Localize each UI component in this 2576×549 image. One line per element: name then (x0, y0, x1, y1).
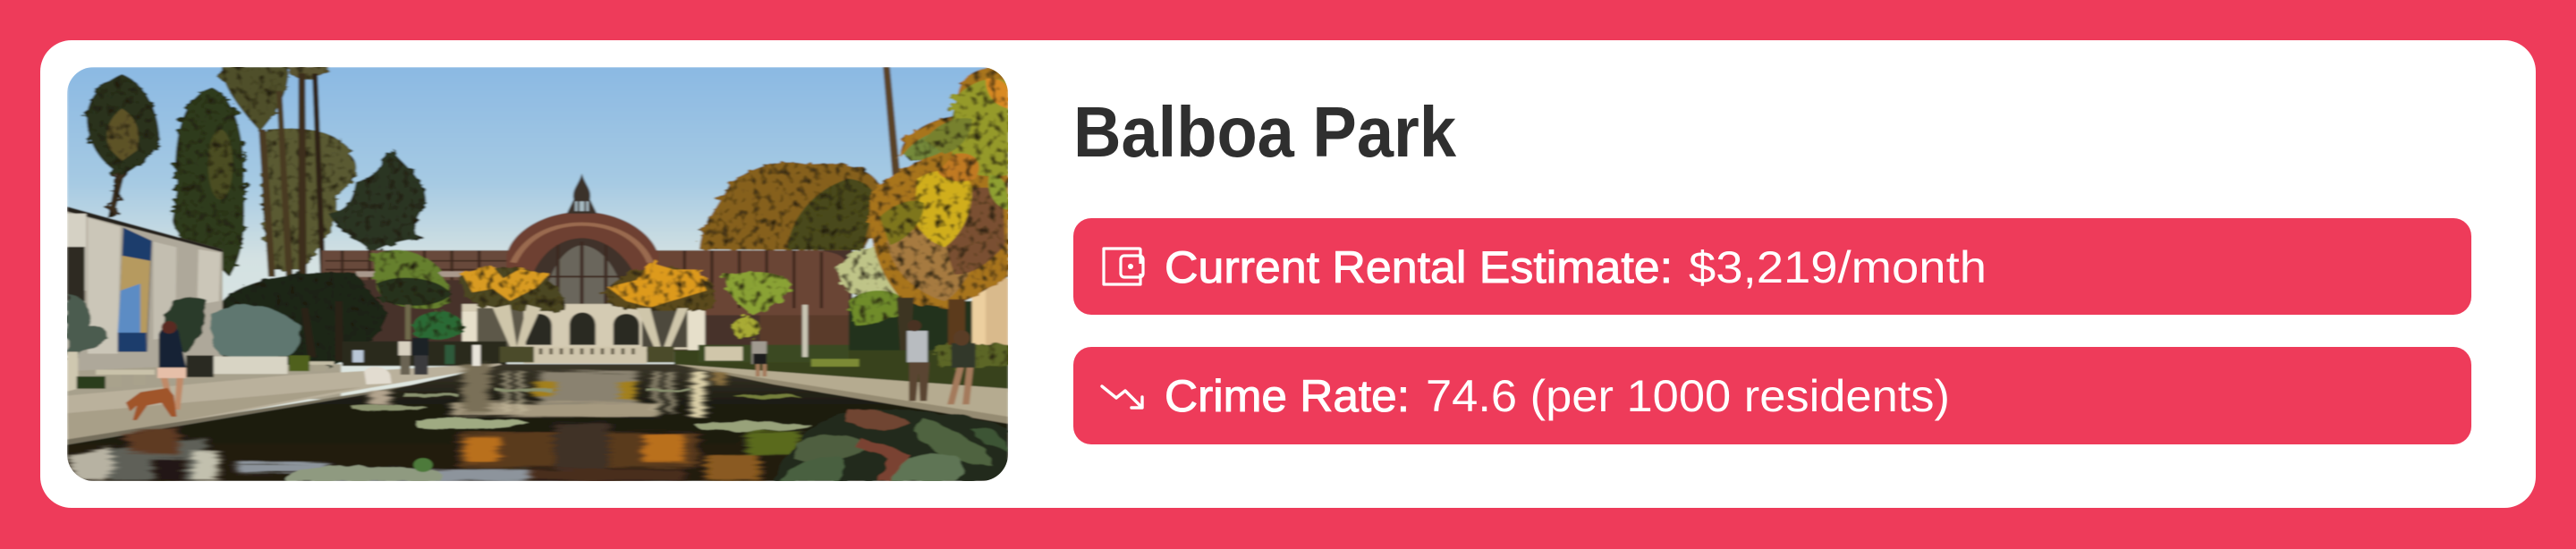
dome (506, 213, 658, 272)
heading: Balboa Park (1073, 92, 1456, 172)
icon: trending down arrow (1102, 386, 1142, 408)
near foliage (223, 68, 1008, 366)
lantern (567, 173, 597, 214)
planters and benches (212, 357, 287, 374)
crime value: 74.6 (per 1000 residents) (1426, 371, 1950, 421)
rental value: $3,219/month (1689, 242, 1987, 292)
palms right (838, 248, 902, 301)
arcade of the building (462, 304, 701, 350)
ground backing (67, 364, 341, 399)
stat bar: rental estimate (1073, 218, 2471, 315)
crime label: Crime Rate: (1165, 371, 1410, 421)
people (126, 320, 976, 420)
walkways (67, 363, 503, 444)
balustrade (523, 347, 647, 363)
photo: Balboa Park botanical building and lily pond (67, 67, 1008, 481)
palm trunks (258, 130, 275, 276)
right wall (972, 278, 1008, 347)
stat bar: crime rate (1073, 347, 2471, 444)
exhibit banner (118, 228, 152, 352)
lily pond (67, 364, 1008, 481)
icon: wallet (1104, 249, 1143, 284)
flower tree trunks (493, 305, 688, 347)
agaves in front of building (67, 294, 301, 360)
foreground leaves (774, 410, 1008, 481)
lily pads (287, 389, 811, 481)
conservatory long wings (322, 250, 852, 352)
distant foliage (87, 67, 882, 276)
reflections in pond (67, 364, 801, 481)
left white building (67, 207, 223, 371)
rental label: Current Rental Estimate: (1165, 242, 1673, 292)
